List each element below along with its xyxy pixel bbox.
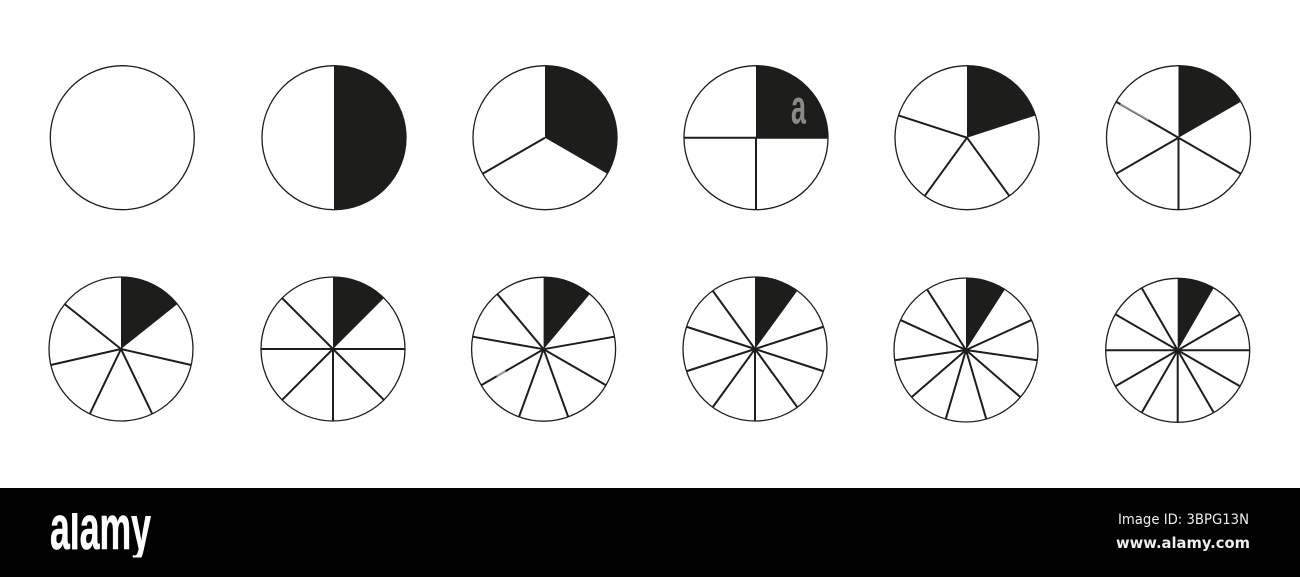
pie: 11 segments — [894, 278, 1038, 422]
pie: 7 segments — [49, 277, 193, 421]
pie: 8 segments — [261, 277, 405, 421]
pie: 2 segments — [262, 66, 406, 210]
website: www.alamy.com — [1116, 534, 1250, 552]
footer band — [0, 488, 1300, 577]
image id: Image ID: 3BPG13N — [1118, 512, 1249, 528]
pie: 6 segments — [1106, 66, 1250, 210]
pie: 10 segments — [683, 277, 827, 421]
watermark letter: a — [791, 82, 806, 134]
pie: 12 segments — [1106, 278, 1250, 422]
logo: alamy: alamy — [50, 494, 151, 563]
pie: whole circle — [50, 66, 194, 210]
pie: 4 segments — [684, 66, 828, 210]
pie: 3 segments — [473, 66, 617, 210]
pie: 9 segments — [472, 277, 616, 421]
pie: 5 segments — [895, 66, 1039, 210]
